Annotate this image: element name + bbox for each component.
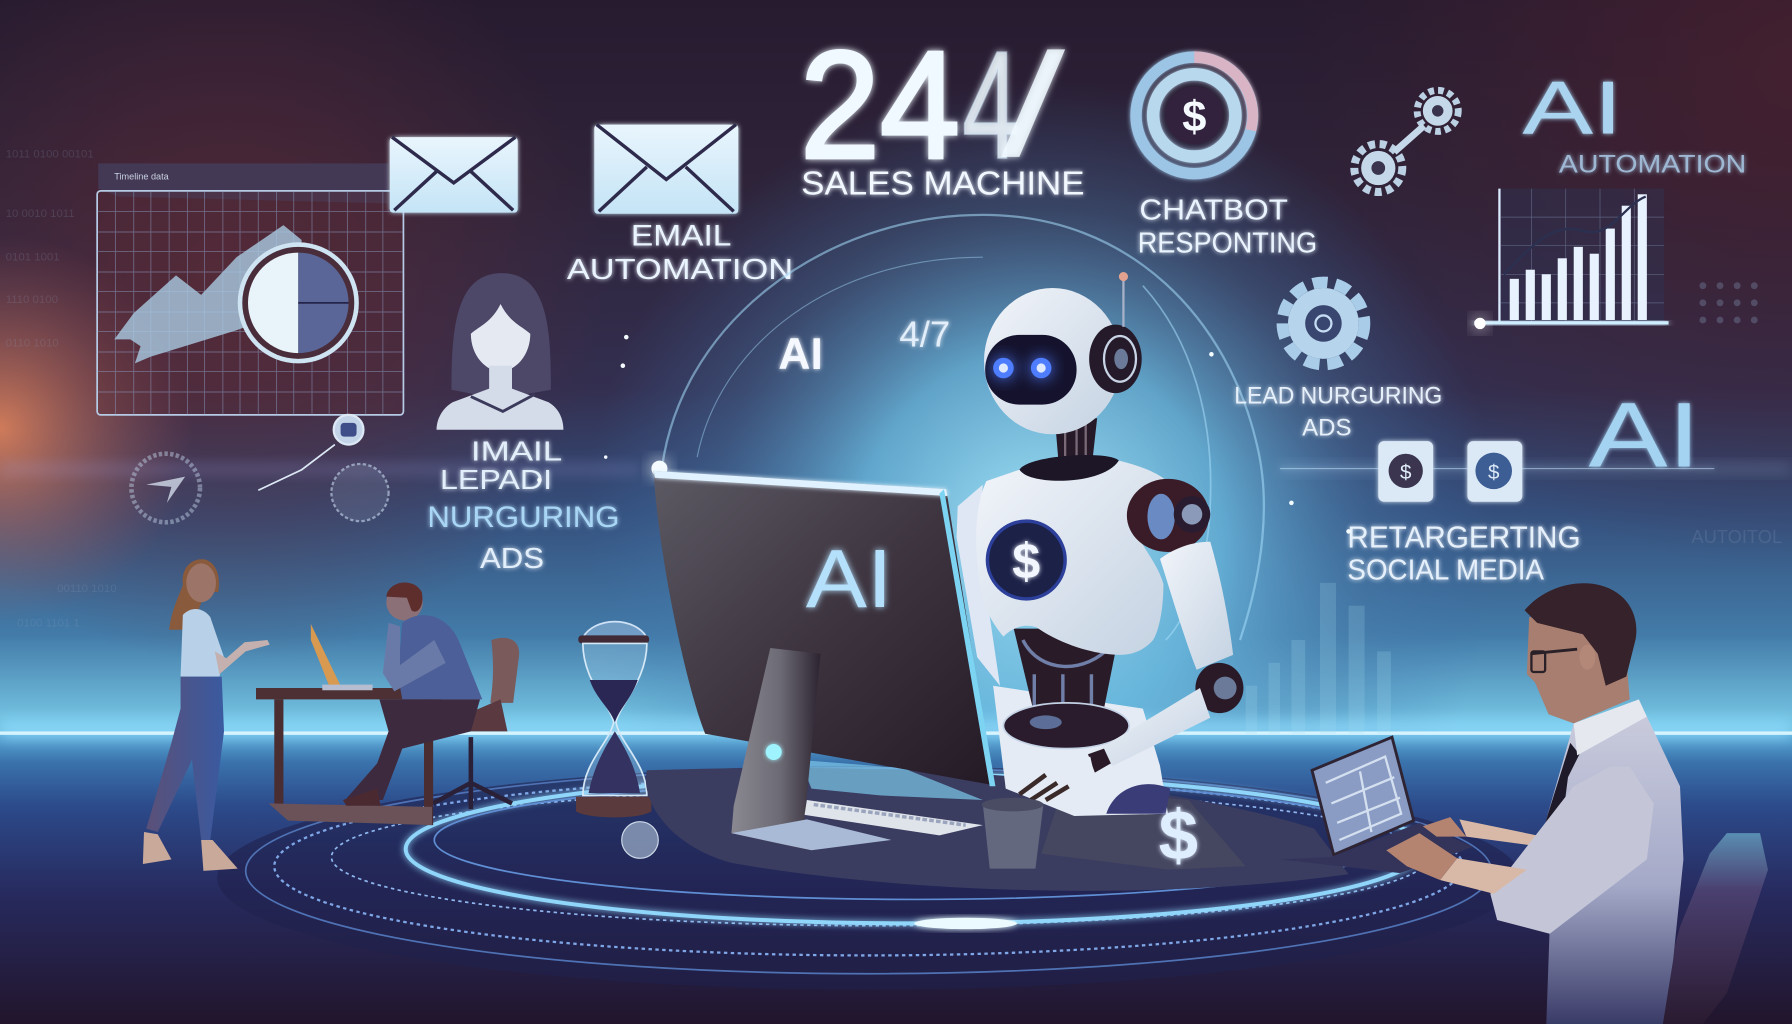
monitor [654, 471, 995, 850]
label: email automation: AUTOMATION [567, 254, 793, 286]
glowing dollar sign: $ [1159, 796, 1198, 875]
label: AI automation: AUTOMATION [1559, 151, 1746, 179]
title: 24/7 sales machine [800, 20, 1066, 191]
desk with stressed man [256, 583, 519, 825]
decorative dots right [1699, 282, 1758, 323]
background faint data text: 1011 0100 00101 [6, 149, 94, 161]
background faint data text: 10 0010 1011 [6, 208, 75, 220]
label: retargeting social media [1347, 519, 1581, 586]
social media icons: $ [1488, 461, 1500, 484]
title: 24/7 sales machine: / [1001, 23, 1066, 186]
icon: large gear [1282, 282, 1365, 365]
title: 24/7 sales machine: 24 [800, 20, 960, 191]
office chair [1654, 833, 1768, 1024]
label: retargeting social media: RETARGERTING [1347, 519, 1581, 554]
background faint data text: 1110 0100 [6, 294, 58, 306]
label: 4/7: 4/7 [899, 313, 950, 354]
man torso [1543, 699, 1683, 1024]
laptop [311, 624, 373, 690]
icon: dollar coin target: $ [1182, 93, 1206, 141]
crumpled object [622, 822, 658, 858]
label: AI automation: AI [1522, 66, 1623, 150]
man with laptop [1280, 583, 1768, 1024]
robot head [984, 272, 1142, 434]
man head [1525, 583, 1636, 723]
label: email lead nurturing ads: ADS [480, 543, 544, 575]
email envelope icon small [390, 137, 518, 213]
social media icons: $ [1400, 461, 1412, 484]
robot torso [976, 461, 1167, 655]
pie chart icon [238, 242, 359, 363]
background faint data text: AUTOITOL [1691, 526, 1782, 547]
label: chatbot responding: CHATBOT [1139, 194, 1288, 226]
label: AI: AI [778, 330, 823, 379]
faint background bars [1246, 583, 1391, 734]
background faint data text: 00110 1010 [57, 583, 117, 595]
woman standing [143, 559, 270, 871]
robot spine and neck [1003, 418, 1129, 749]
left panel: chart with pie: Timeline data [114, 171, 170, 181]
robot [957, 272, 1243, 816]
label: retargeting social media: SOCIAL MEDIA [1347, 554, 1544, 586]
background faint data text: 0110 1010 [6, 337, 59, 349]
label: lead nurturing ads: ADS [1302, 414, 1352, 441]
label: large AI: AI [1589, 384, 1701, 486]
sparkles [537, 335, 1351, 534]
dollar badge: $ [1012, 532, 1040, 589]
label: email automation [567, 220, 793, 286]
label: lead nurturing ads: LEAD NURGURING [1234, 382, 1442, 409]
left panel: chart with pie [97, 163, 403, 415]
label: email lead nurturing ads [427, 436, 619, 575]
laptop [1280, 737, 1473, 873]
monitor stand [731, 648, 891, 850]
icon: linked gears [1354, 90, 1458, 192]
subtitle: SALES MACHINE [801, 165, 1085, 202]
circular glowing platform [217, 766, 1520, 990]
bar chart [1474, 189, 1669, 329]
title: 24/7 sales machine: 4 [962, 20, 1019, 191]
label: email automation: EMAIL [631, 220, 731, 253]
background faint data text: 0101 1001 [6, 252, 60, 264]
small network icons [131, 415, 389, 522]
bright floor flare [914, 918, 1017, 929]
label: chatbot responding [1138, 194, 1317, 260]
keyboard [805, 800, 983, 835]
person avatar icon [437, 273, 563, 430]
office chair [433, 638, 519, 809]
background faint data text [6, 149, 1782, 629]
forearm and hands [1440, 858, 1527, 894]
dollar badge [987, 521, 1065, 599]
label: email lead nurturing ads: IMAIL [471, 436, 562, 467]
robot right arm [1019, 479, 1243, 814]
man arm [1490, 767, 1654, 934]
background faint data text: 0100 1101 1 [17, 617, 80, 629]
coffee cup [982, 798, 1043, 869]
man [343, 583, 482, 806]
icon: dollar coin target [1136, 51, 1258, 174]
hourglass [576, 622, 651, 817]
label: email lead nurturing ads: NURGURING [427, 501, 619, 534]
label: chatbot responding: RESPONTING [1138, 228, 1317, 260]
social media icons [1280, 441, 1714, 502]
desk surface [646, 760, 1349, 891]
floor [0, 720, 1792, 1024]
email envelope icon large [594, 125, 738, 214]
monitor: AI [806, 534, 893, 625]
label: email lead nurturing ads: LEPADI [440, 464, 552, 495]
robot left arm behind [957, 485, 1000, 686]
hologram dome behind robot [661, 215, 1264, 640]
robot lower body [993, 686, 1168, 816]
label: lead nurturing ads [1234, 382, 1442, 441]
robot ear [1089, 325, 1142, 393]
rear forearm [1459, 819, 1543, 847]
label: AI automation [1522, 66, 1746, 179]
